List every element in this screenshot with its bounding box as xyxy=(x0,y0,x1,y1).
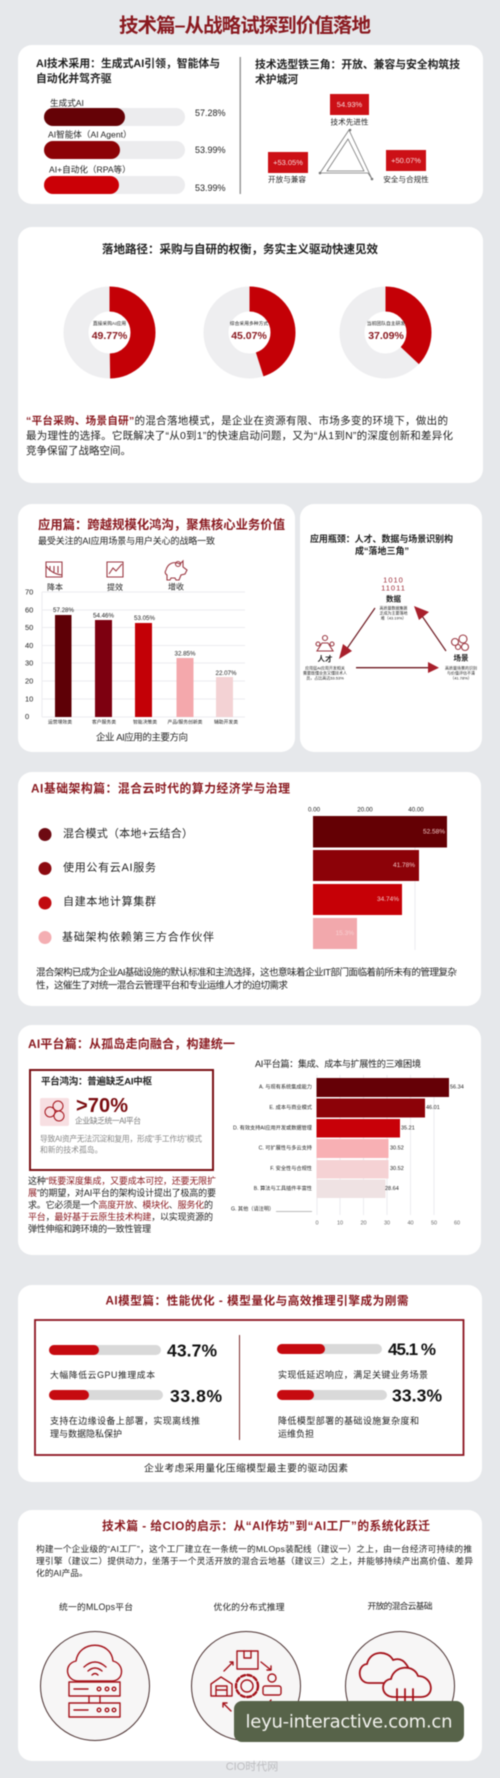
callout: technology advancement xyxy=(330,94,369,126)
legend: self-built cluster: 自建本地计算集群 xyxy=(63,894,156,908)
bar chart: application directions: 产品/服务创新类 xyxy=(168,718,203,726)
icon: piggy bank revenue xyxy=(165,561,187,592)
heading: technology selection triangle: 技术选型铁三角：开放、兼容与安全构筑技 xyxy=(255,57,460,71)
bar chart: application directions: 22.07% xyxy=(216,670,237,677)
heading: platform chart: AI平台篇：集成、成本与扩展性的三难困境 xyxy=(255,1058,421,1069)
node: scenario: 场景 xyxy=(454,652,469,662)
heading: technology selection triangle xyxy=(255,57,460,86)
bar chart: platform dilemmas: 60 xyxy=(454,1220,460,1226)
callout box: platform gap: >70% xyxy=(76,1095,128,1117)
node: talent: 需要既懂业务又懂技术人 xyxy=(303,670,347,676)
panel: AI infrastructure xyxy=(18,772,481,1006)
progress bar: AI agent xyxy=(44,128,226,159)
metric: low latency: 45.1 % xyxy=(388,1340,436,1359)
bar chart: application directions xyxy=(25,588,245,744)
bar chart: application directions: 53.05% xyxy=(134,615,155,622)
panel: landing path xyxy=(18,227,483,483)
bar chart: application directions: 50 xyxy=(25,623,33,632)
caption: 企业考虑采用量化压缩模型最主要的驱动因素 xyxy=(144,1462,348,1474)
bar chart: platform dilemmas: B. 算法与工具插件丰富性 xyxy=(254,1184,312,1192)
metric: infrastructure complexity: 降低模型部署的基础设施复杂度和 xyxy=(278,1415,419,1426)
bar chart: application directions: 60 xyxy=(25,606,33,614)
arrow: data to talent xyxy=(339,608,375,659)
column: MLOps platform: 统一的MLOps平台 xyxy=(59,1601,133,1612)
watermark badge: leyu-interactive.com.cn xyxy=(246,1712,452,1732)
text block: mixed landing model: 最为理性的选择。它既解决了“从0到1”的快速启动问题，又为“从1到N”的深度创新和差异化 xyxy=(26,429,454,442)
donut chart: mixed approach xyxy=(216,299,283,366)
bar chart: platform dilemmas: E. 成本与商业模式 xyxy=(269,1103,313,1111)
column: MLOps platform xyxy=(40,1601,150,1740)
donut chart: direct purchase: 直接采购AI应用 xyxy=(93,320,126,327)
bar chart: application directions: 30 xyxy=(25,658,33,668)
node: talent xyxy=(303,636,347,680)
bar chart: platform dilemmas: 28.64 xyxy=(385,1186,399,1192)
heading: AI technology adoption: 自动化并驾齐驱 xyxy=(36,71,112,85)
column: optimized distributed inference xyxy=(192,1601,300,1740)
bar chart: infrastructure xyxy=(308,806,447,950)
icon: efficiency: 提效 xyxy=(107,582,123,592)
bar chart: infrastructure: 15.3% xyxy=(336,930,354,937)
donut chart: in-house development: 37.09% xyxy=(368,330,404,342)
icon: cost reduction xyxy=(46,562,63,592)
panel: technology adoption and triangle xyxy=(18,45,483,204)
heading: AI model: AI模型篇：性能优化 - 模型量化与高效推理引擎成为刚需 xyxy=(106,1294,408,1308)
callout: openness and compatibility xyxy=(268,152,308,184)
legend: public cloud xyxy=(38,860,156,875)
donut chart: mixed approach: 综合采用多种方式 xyxy=(230,320,268,327)
text block: platform expectation: 求。它必须是一个高度开放、模块化、服务化的 xyxy=(28,1199,213,1210)
node: talent: 员，占比高达53.53% xyxy=(306,674,344,680)
callout: technology advancement: 技术先进性 xyxy=(331,116,369,126)
bar chart: application directions: 客户服务类 xyxy=(92,718,116,726)
icon: cloud server xyxy=(68,1645,122,1717)
bar chart: application directions: 0 xyxy=(25,712,29,721)
bar chart: infrastructure: 0.00 xyxy=(308,806,321,814)
bar chart: application directions: 运营增效类 xyxy=(48,718,72,726)
node: scenario xyxy=(445,635,477,680)
bar chart: infrastructure: 34.74% xyxy=(377,896,399,903)
donut chart: in-house development xyxy=(352,299,419,366)
metric: edge deployment: 理与数据隐私保护 xyxy=(50,1428,122,1439)
column: open hybrid cloud foundation xyxy=(346,1600,454,1740)
bar chart: application directions: 企业 AI应用的主要方向 xyxy=(96,732,188,744)
bar chart: platform dilemmas: 10 xyxy=(337,1220,343,1226)
bar chart: platform dilemmas: 30.52 xyxy=(390,1146,404,1152)
icon: efficiency xyxy=(107,562,123,592)
progress bar: generative AI xyxy=(44,97,226,126)
bar chart: platform dilemmas: D. 有效支持AI应用开发或数据管理 xyxy=(233,1124,313,1132)
bar chart: platform dilemmas xyxy=(231,1075,464,1226)
watermark badge xyxy=(234,1701,464,1742)
progress bar: AI plus automation xyxy=(44,164,226,194)
node: data: 高质量数据集匮 xyxy=(380,604,408,610)
heading: CIO: 技术篇 - 给CIO的启示：从“AI作坊”到“AI工厂”的系统化跃迁 xyxy=(102,1519,430,1533)
progress bar: generative AI: 生成式AI xyxy=(50,97,84,108)
text block: platform expectation: 展”的期望，对AI平台的架构设计提出了极高的要 xyxy=(28,1187,216,1198)
callout: security and compliance: +50.07% xyxy=(391,156,421,165)
legend: hybrid mode: 混合模式（本地+云结合） xyxy=(63,826,193,840)
bar chart: platform dilemmas: 50 xyxy=(431,1220,437,1226)
metric: low latency xyxy=(277,1340,436,1380)
metric: infrastructure complexity: 33.3% xyxy=(392,1386,442,1406)
callout box: platform gap: 导致AI资产无法沉淀和复用，形成“手工作坊”模式 xyxy=(40,1134,202,1144)
text block: mixed landing model: “平台采购、场景自研”的混合落地模式，是企业在资源有限、市场多变的环境下，做出的 xyxy=(26,414,448,427)
heading: AI infrastructure: AI基础架构篇：混合云时代的算力经济学与治理 xyxy=(31,782,290,796)
callout: openness and compatibility: 开放与兼容 xyxy=(268,174,306,184)
progress bar: AI agent: AI智能体（AI Agent） xyxy=(48,128,132,140)
text block: hybrid architecture: 性，这催生了对统一混合云管理平台和专业运维人才的迫切需求 xyxy=(36,980,288,992)
node: data xyxy=(380,576,408,620)
text block: AI factory: 理引擎（建议二）提供动力，坐落于一个灵活开放的混合云地基（建议三）之上，并能够持续产出高价值、差异 xyxy=(36,1555,473,1566)
bar chart: platform dilemmas: 0 xyxy=(315,1220,319,1226)
metric: infrastructure complexity: 运维负担 xyxy=(278,1428,314,1439)
legend: third party: 基础架构依赖第三方合作伙伴 xyxy=(62,930,214,944)
text block: platform expectation: 弹性伸缩和跨环境的一致性管理 xyxy=(28,1223,151,1234)
node: data: 1010 xyxy=(383,576,404,584)
text block: hybrid architecture xyxy=(36,966,457,992)
icon: logistics cycle xyxy=(211,1651,281,1720)
node: scenario: 高质量场景的识别 xyxy=(445,664,477,670)
heading: bottleneck xyxy=(310,533,453,556)
heading: bottleneck: 应用瓶颈：人才、数据与场景识别构 xyxy=(310,533,453,544)
bar chart: platform dilemmas: 56.34 xyxy=(450,1084,464,1090)
bar chart: platform dilemmas: G. 其他（请注明） xyxy=(231,1204,274,1212)
callout box: platform gap xyxy=(30,1070,213,1170)
text block: mixed landing model xyxy=(26,414,454,457)
node: data: 11011 xyxy=(381,584,406,592)
icon: cost reduction: 降本 xyxy=(47,582,63,592)
metric: GPU inference cost: 大幅降低云GPU推理成本 xyxy=(50,1369,155,1380)
metric: edge deployment: 支持在边缘设备上部署，实现离线推 xyxy=(50,1415,200,1426)
bar chart: application directions: 32.85% xyxy=(174,650,196,658)
source watermark: CIO时代网 xyxy=(226,1760,278,1773)
title: 技术篇–从战略试探到价值落地 xyxy=(119,14,371,37)
heading: application: 应用篇：跨越规模化鸿沟，聚焦核心业务价值 xyxy=(38,517,285,532)
bar chart: platform dilemmas: 20 xyxy=(360,1220,367,1226)
bar chart: platform dilemmas: A. 与现有系统集成能力 xyxy=(259,1082,312,1090)
legend: hybrid mode xyxy=(38,826,193,841)
bar chart: application directions: 20 xyxy=(25,676,33,686)
bar chart: platform dilemmas: 30.52 xyxy=(390,1166,404,1172)
node: talent: 应用层AI应用开发相关 xyxy=(305,664,345,670)
node: talent: 人才 xyxy=(318,654,333,664)
icon: piggy bank revenue: 增收 xyxy=(168,582,184,592)
donut chart: direct purchase: 49.77% xyxy=(92,330,128,342)
bar chart: infrastructure: 20.00 xyxy=(357,806,373,814)
bar chart: infrastructure: 41.78% xyxy=(393,862,415,869)
bar chart: application directions: 10 xyxy=(25,694,33,704)
node: scenario: 与价值评估不清 xyxy=(447,670,475,676)
legend: self-built cluster xyxy=(38,894,156,910)
heading: AI platform: AI平台篇：从孤岛走向融合，构建统一 xyxy=(28,1036,235,1051)
heading: technology selection triangle: 术护城河 xyxy=(255,72,298,86)
panel: application bottleneck triangle xyxy=(300,504,482,752)
subheading: 最受关注的AI应用场景与用户关心的战略一致 xyxy=(38,535,215,546)
callout: security and compliance xyxy=(383,150,429,184)
arrow: scenario to data xyxy=(414,606,446,651)
bar chart: application directions: 70 xyxy=(25,588,33,596)
text block: AI factory xyxy=(36,1543,473,1578)
bar chart: platform dilemmas: 35.21 xyxy=(401,1126,415,1132)
triangle diagram xyxy=(319,129,373,180)
callout: technology advancement: 54.93% xyxy=(337,100,363,109)
text block: AI factory: 化的AI产品。 xyxy=(36,1567,88,1578)
progress bar: generative AI: 57.28% xyxy=(195,108,226,118)
donut chart: mixed approach: 45.07% xyxy=(231,330,267,342)
callout: openness and compatibility: +53.05% xyxy=(273,158,303,167)
progress bar: AI plus automation: 53.99% xyxy=(195,183,226,193)
icon: hybrid cloud circuit xyxy=(360,1653,432,1717)
metric: infrastructure complexity xyxy=(277,1386,442,1439)
bar chart: platform dilemmas: C. 可扩展性与多云支持 xyxy=(259,1144,312,1152)
callout box: platform gap: 平台鸿沟：普遍缺乏AI中枢 xyxy=(41,1076,152,1088)
donut chart: direct purchase xyxy=(76,299,143,366)
metric: GPU inference cost xyxy=(49,1340,217,1380)
heading: AI technology adoption xyxy=(36,56,220,85)
heading: AI technology adoption: AI技术采用：生成式AI引领，智能体与 xyxy=(36,56,220,70)
node: data: 数据 xyxy=(386,594,401,604)
text block: hybrid architecture: 混合架构已成为企业AI基础设施的默认标准和主流选择，这也意味着企业IT部门面临着前所未有的管理复杂 xyxy=(36,966,457,978)
icon: overlapping circles xyxy=(40,1098,69,1126)
panel: application chart xyxy=(18,504,295,752)
bar chart: application directions: 辅助开发类 xyxy=(214,718,238,726)
column: optimized distributed inference: 优化的分布式推理 xyxy=(214,1601,285,1612)
text block: mixed landing model: 竞争保留了战略空间。 xyxy=(26,444,131,457)
text block: platform expectation xyxy=(28,1175,216,1234)
panel: AI model xyxy=(18,1285,482,1482)
heading: landing path: 落地路径：采购与自研的权衡，务实主义驱动快速见效 xyxy=(102,242,378,256)
text block: platform expectation: 平台，最好基于云原生技术构建，以实现资源的 xyxy=(28,1211,213,1222)
callout box: platform gap: 企业缺乏统一AI平台 xyxy=(75,1116,141,1126)
progress bar: AI plus automation: AI+自动化（RPA等） xyxy=(49,164,131,174)
node: scenario: （41.78%） xyxy=(450,676,472,680)
bar chart: platform dilemmas: 46.01 xyxy=(426,1105,440,1111)
panel: CIO recommendations xyxy=(18,1510,482,1761)
bar chart: infrastructure: 52.58% xyxy=(423,828,445,836)
bar chart: application directions: 智能决策类 xyxy=(133,718,157,726)
metric: GPU inference cost: 43.7% xyxy=(167,1340,217,1360)
bar chart: platform dilemmas: 30 xyxy=(384,1220,390,1226)
node: data: 难（43.19%） xyxy=(381,614,406,620)
node: data: 乏成为主要落地 xyxy=(380,610,408,616)
donut chart: in-house development: 当前团队自主研发 xyxy=(367,320,405,327)
bar chart: platform dilemmas: F. 安全性与合规性 xyxy=(270,1164,312,1172)
bar chart: platform dilemmas: 40 xyxy=(407,1220,414,1226)
metric: low latency: 实现低延迟响应，满足关键业务场景 xyxy=(278,1369,428,1380)
heading: bottleneck: 成“落地三角” xyxy=(355,545,409,556)
metric: edge deployment: 33.8% xyxy=(170,1386,222,1406)
metric: edge deployment xyxy=(49,1386,222,1439)
bar chart: application directions: 54.46% xyxy=(93,612,114,620)
bar chart: application directions: 57.28% xyxy=(53,607,74,614)
panel: AI platform xyxy=(18,1025,481,1255)
progress bar: AI agent: 53.99% xyxy=(195,145,226,155)
callout: security and compliance: 安全与合规性 xyxy=(383,174,429,184)
bar chart: infrastructure: 40.00 xyxy=(408,806,424,814)
callout box: platform gap: 和新的技术孤岛。 xyxy=(40,1144,102,1154)
arrow: talent to scenario xyxy=(356,662,439,673)
text block: platform expectation: 这种“既要深度集成，又要成本可控，还要无限扩 xyxy=(28,1175,216,1186)
column: open hybrid cloud foundation: 开放的混合云基础 xyxy=(368,1600,433,1611)
legend: public cloud: 使用公有云AI服务 xyxy=(63,860,156,874)
text block: AI factory: 构建一个企业级的“AI工厂”，这个工厂建立在一条统一的MLOps装配线（建议一）之上，由一台经济可持续的推 xyxy=(36,1543,472,1554)
bar chart: application directions: 40 xyxy=(25,641,33,650)
